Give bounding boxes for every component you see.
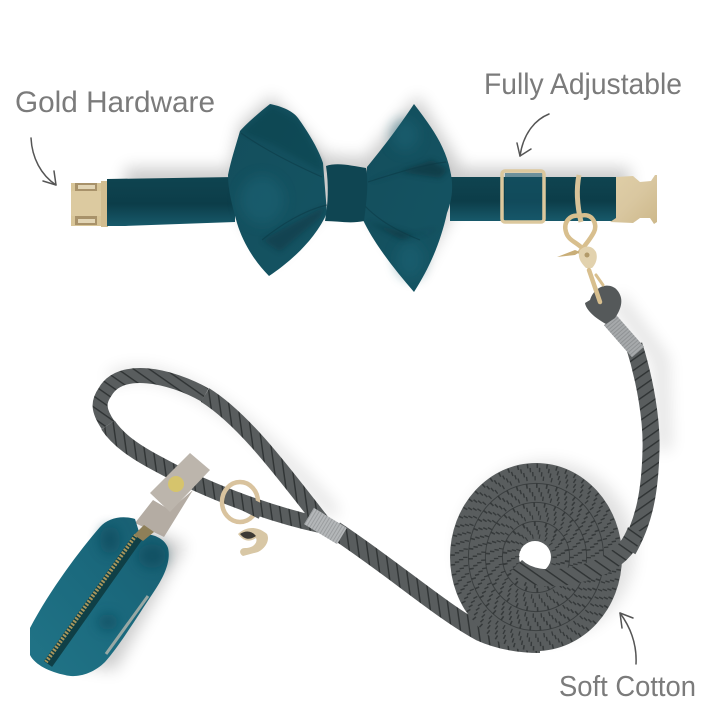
- coil outer ring: [453, 466, 619, 648]
- label: Gold Hardware: Gold Hardware: [15, 86, 215, 119]
- coil ring separators: [468, 483, 604, 631]
- right wing: [363, 104, 452, 292]
- whipping near clip: [610, 320, 638, 352]
- ring and charm: [222, 482, 268, 556]
- fold shading: [242, 106, 448, 252]
- arrow: gold hardware: [31, 138, 56, 185]
- collar strap left: [107, 177, 235, 226]
- coil hole: [519, 541, 551, 573]
- knot: [325, 164, 367, 222]
- zipper: [48, 537, 138, 664]
- zipper pull: [134, 525, 154, 541]
- dark velvet patches: [98, 526, 166, 630]
- coil second ring: [488, 505, 584, 609]
- D-ring: [577, 175, 581, 222]
- rope leash: [100, 286, 651, 651]
- label: Soft Cotton: Soft Cotton: [559, 671, 696, 703]
- arrow: soft cotton: [620, 613, 636, 664]
- tan base peek: [106, 596, 148, 654]
- slide adjuster: [502, 171, 544, 222]
- poop bag pouch: [30, 453, 210, 676]
- pouch body: [30, 517, 169, 676]
- rope over ring: [236, 499, 262, 512]
- charm: [238, 528, 268, 556]
- snap hook: [557, 215, 603, 302]
- label: Fully Adjustable: Fully Adjustable: [484, 68, 682, 101]
- left wing: [228, 104, 327, 276]
- side release buckle: [610, 175, 657, 224]
- arrow: fully adjustable: [517, 114, 549, 156]
- bow tie: [228, 104, 452, 292]
- soft shadows: [55, 96, 664, 670]
- collar strap right: [450, 177, 617, 221]
- coil base: [450, 463, 622, 651]
- loop handle: [100, 376, 322, 525]
- coil inner ring: [505, 524, 567, 590]
- long rope run to coil: [335, 530, 540, 644]
- collar with bow tie: [71, 104, 657, 292]
- rope from clip down to coil: [628, 345, 651, 550]
- rope crossing over coil: [516, 530, 636, 578]
- whipping at loop: [309, 516, 342, 536]
- rope end knot: [585, 286, 621, 324]
- leather strap: [135, 490, 193, 537]
- fold lines: [241, 133, 446, 240]
- coil third ring: [471, 486, 601, 628]
- gold ring: [222, 482, 258, 522]
- gold snap: [168, 476, 184, 492]
- left side release buckle: [71, 181, 108, 227]
- fold highlights: [240, 119, 424, 278]
